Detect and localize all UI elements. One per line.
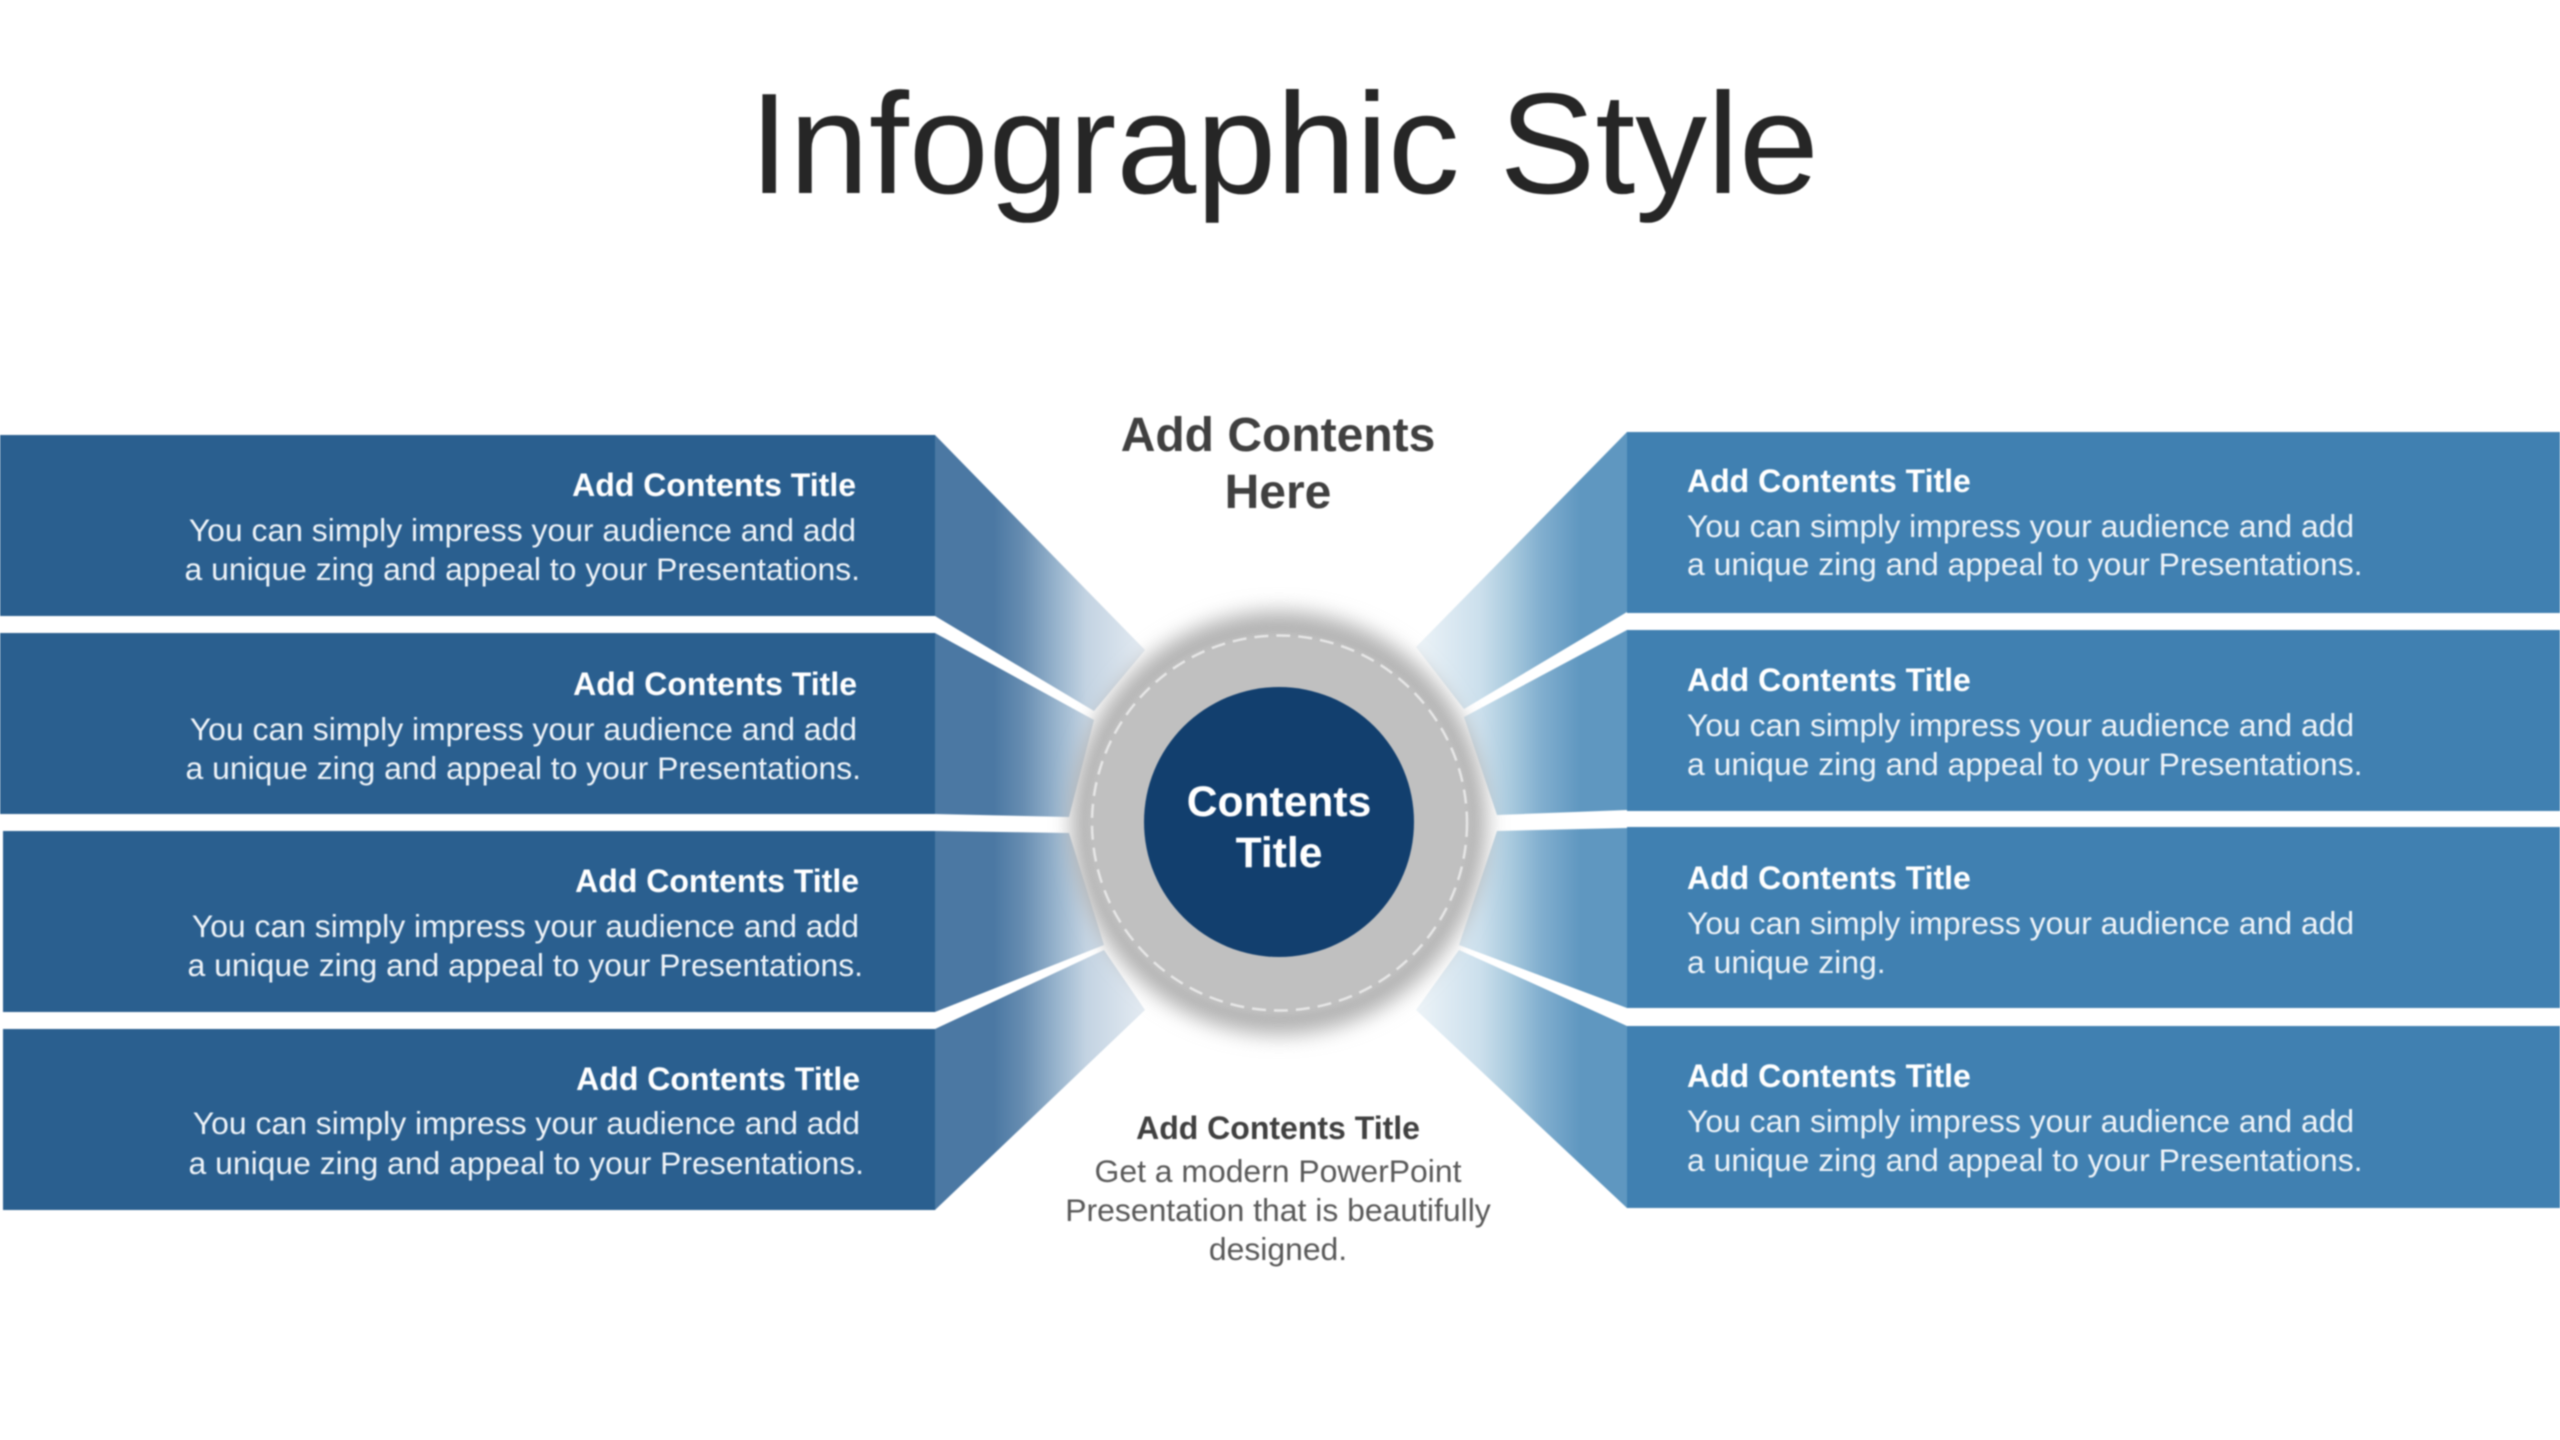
bottom center text block: Presentation that is beautifully <box>1065 1192 1491 1228</box>
gray ring <box>1087 632 1471 1016</box>
panel: right row 2: a unique zing and appeal to your Presentations. <box>1687 746 2362 782</box>
panel: right row 4: a unique zing and appeal to your Presentations. <box>1687 1142 2362 1178</box>
panel: right row 1 <box>1627 432 2560 613</box>
center label: Title <box>1236 829 1322 877</box>
panel: left row 1: You can simply impress your audience and add <box>189 512 856 548</box>
center circle <box>1144 687 1414 957</box>
panel: right row 1: Add Contents Title <box>1687 463 1971 499</box>
panel: right row 4 <box>1627 1026 2560 1208</box>
panel: left row 4: a unique zing and appeal to your Presentations. <box>188 1145 864 1181</box>
dashed ring <box>1092 636 1467 1010</box>
title: Infographic Style <box>749 64 1819 224</box>
panel: right row 2: Add Contents Title <box>1687 662 1971 698</box>
bottom center text block: Get a modern PowerPoint <box>1095 1153 1462 1189</box>
bottom center text block: designed. <box>1209 1231 1347 1267</box>
panel: left row 3: Add Contents Title <box>575 863 859 899</box>
top center heading <box>1121 409 1435 519</box>
panel: right row 2 <box>1627 630 2560 811</box>
panel: right row 3 <box>1627 827 2560 1008</box>
panel: left row 1 <box>0 435 935 616</box>
center hub <box>1071 611 1487 1035</box>
panel: right row 3: Add Contents Title <box>1687 860 1971 896</box>
panel: left row 3: a unique zing and appeal to your Presentations. <box>188 947 863 983</box>
top center heading: Here <box>1225 466 1331 519</box>
center label <box>1187 778 1371 877</box>
panel: right row 1: a unique zing and appeal to your Presentations. <box>1687 546 2362 582</box>
panel: left row 4: You can simply impress your audience and add <box>193 1105 860 1141</box>
panel: left row 2: a unique zing and appeal to your Presentations. <box>186 750 861 786</box>
panel: left row 3: You can simply impress your audience and add <box>192 908 859 944</box>
panel: right row 3: You can simply impress your audience and add <box>1687 905 2354 941</box>
panel: right row 4: You can simply impress your audience and add <box>1687 1103 2354 1139</box>
panel: left row 2: You can simply impress your audience and add <box>190 711 857 747</box>
panel: left row 2 <box>0 633 935 814</box>
left fan wedges <box>935 435 1145 1210</box>
panel: left row 4: Add Contents Title <box>576 1061 860 1097</box>
bottom center text block <box>1065 1110 1491 1267</box>
hub shadow halo <box>1071 611 1487 1035</box>
panel: left row 1: a unique zing and appeal to your Presentations. <box>184 551 860 587</box>
panel: left row 4 <box>3 1029 935 1210</box>
top center heading: Add Contents <box>1121 409 1435 462</box>
panel: right row 4: Add Contents Title <box>1687 1058 1971 1094</box>
panel: right row 3: a unique zing. <box>1687 944 1886 980</box>
center label: Contents <box>1187 778 1371 826</box>
bottom center text block: Add Contents Title <box>1136 1110 1420 1146</box>
panel: right row 1: You can simply impress your audience and add <box>1687 508 2354 544</box>
panel: left row 1: Add Contents Title <box>572 467 856 503</box>
panel: left row 2: Add Contents Title <box>573 666 857 702</box>
right fan wedges <box>1416 432 1627 1208</box>
panel: left row 3 <box>3 831 935 1012</box>
panel: right row 2: You can simply impress your audience and add <box>1687 707 2354 743</box>
